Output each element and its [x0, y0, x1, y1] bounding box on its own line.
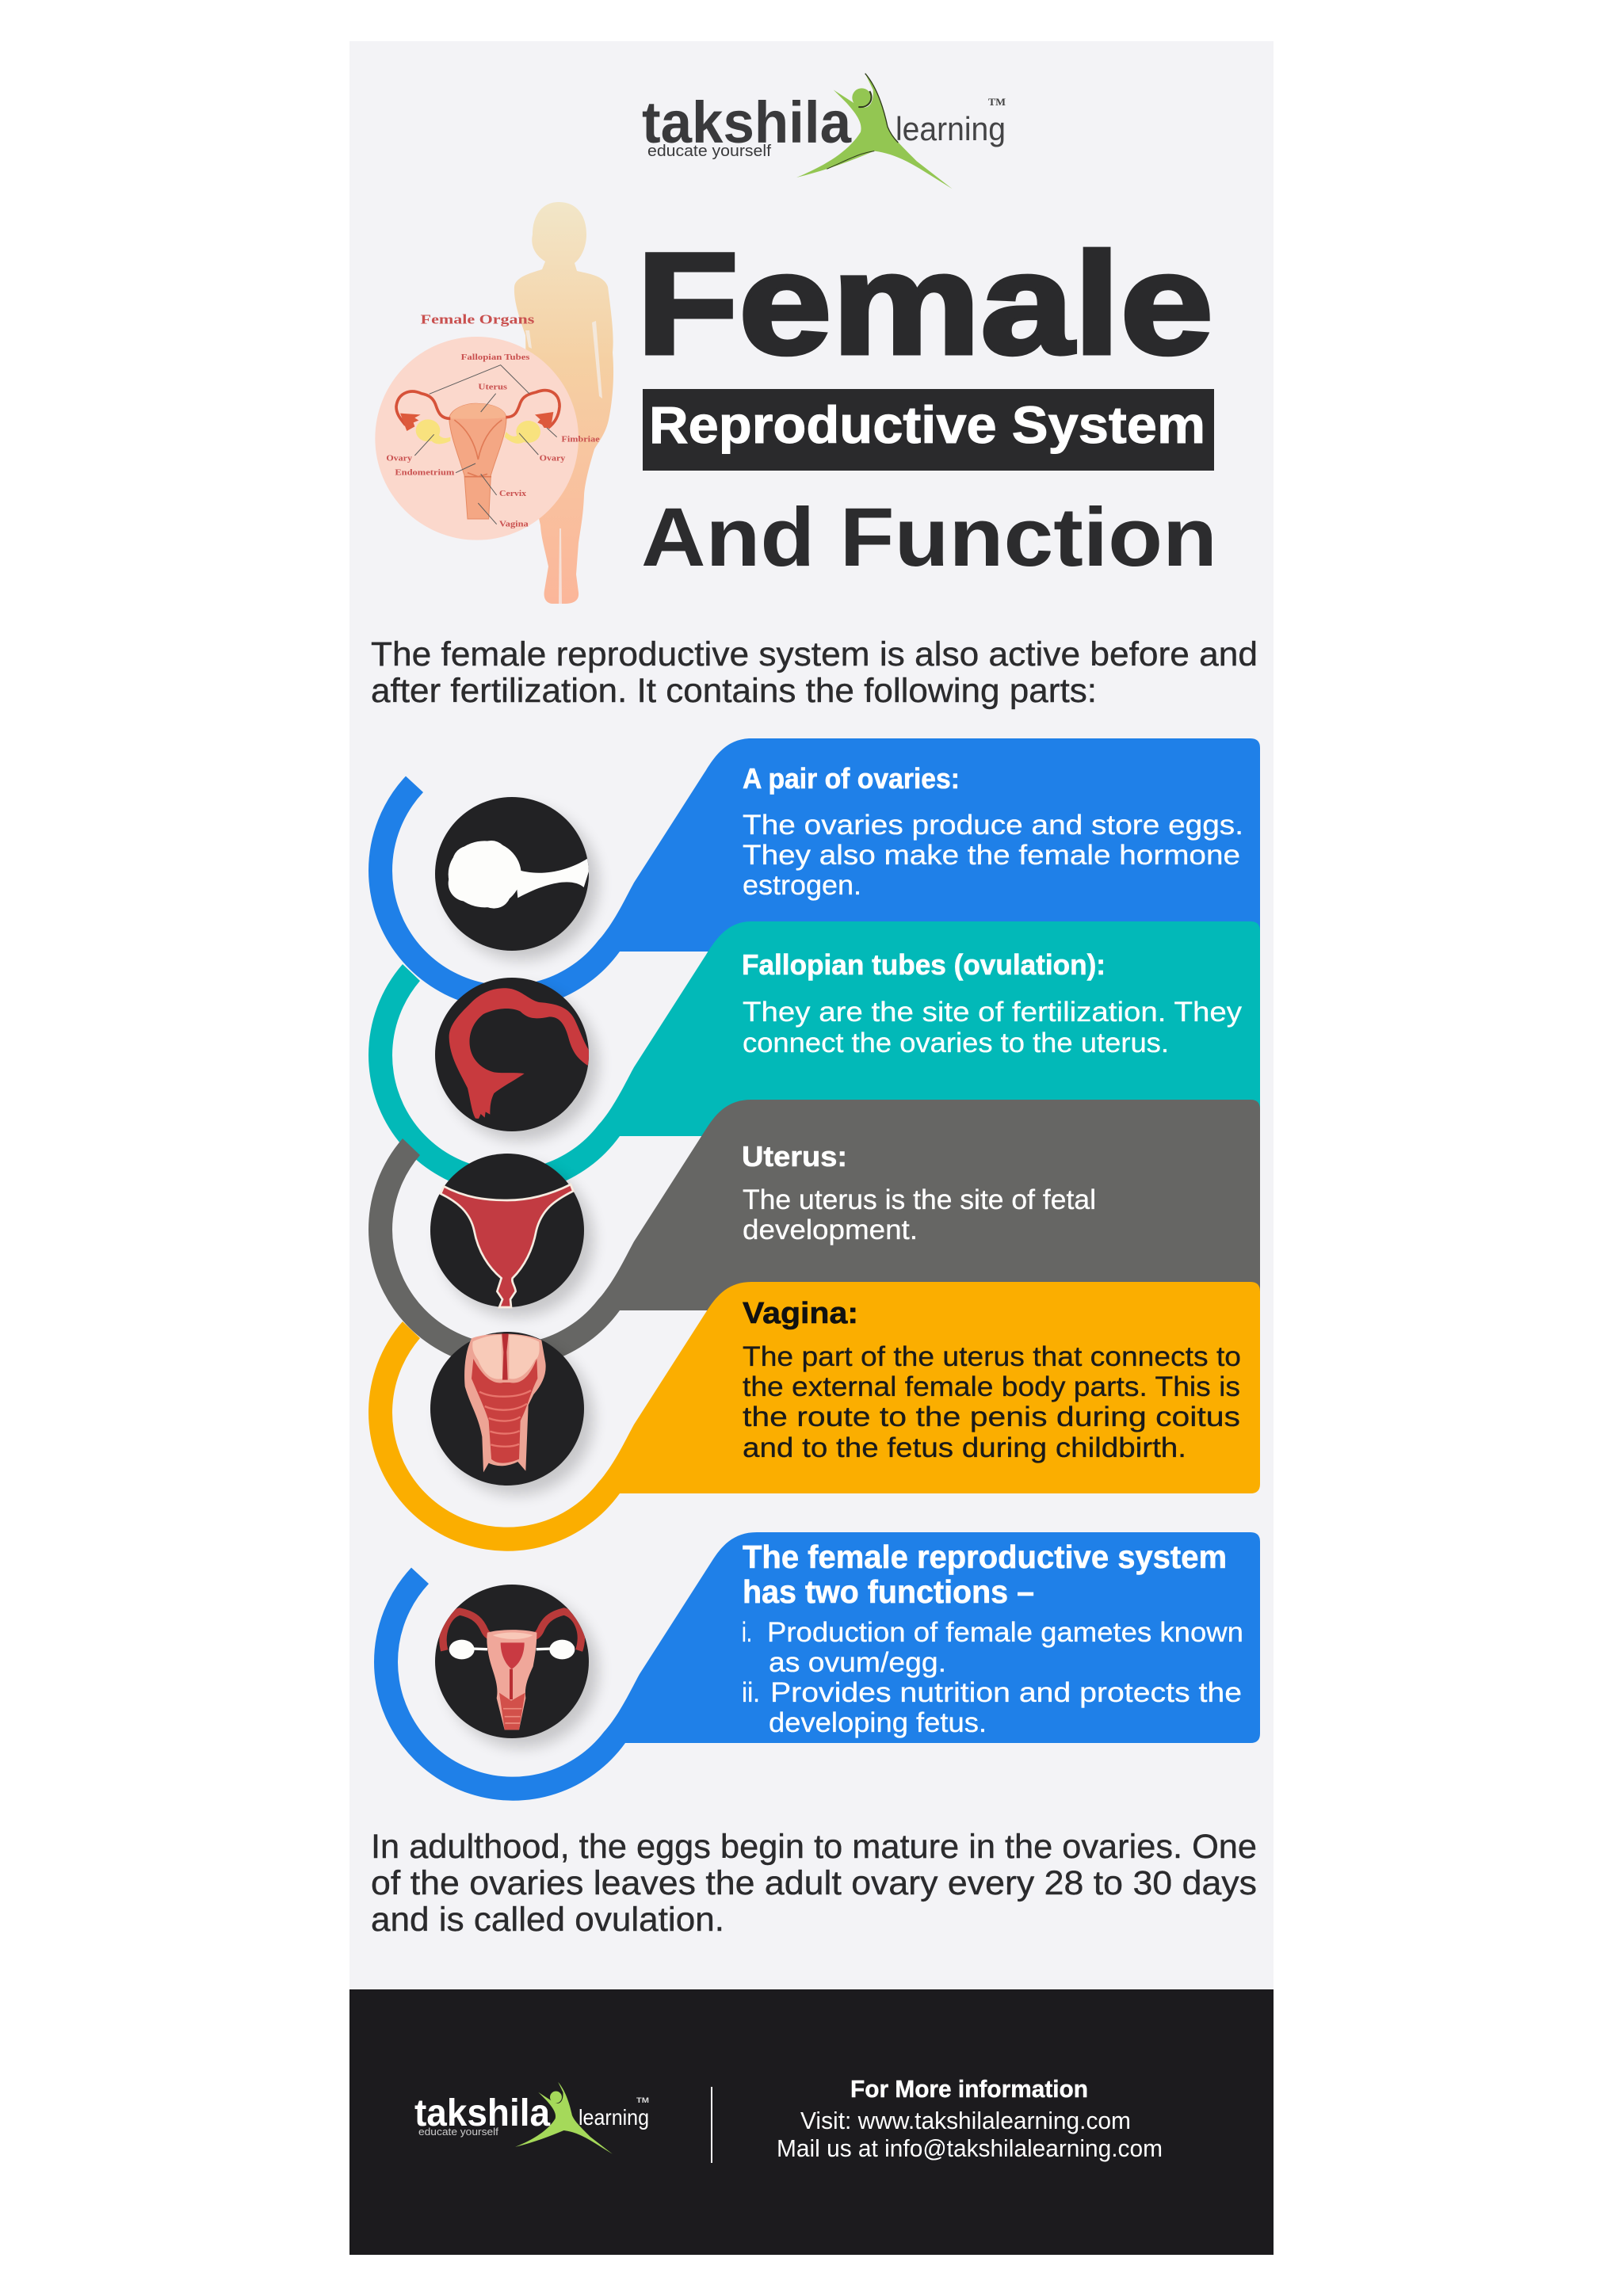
- organ labels: [386, 353, 600, 528]
- closing paragraph: [371, 1828, 1257, 1939]
- text: fallopian tubes: [742, 948, 1243, 1058]
- text: vagina: the external female body parts. This is: [743, 1371, 1240, 1402]
- text: fallopian tubes: They are the site of fertilization. They: [743, 997, 1243, 1028]
- organ labels: Uterus: [478, 383, 507, 392]
- text: a pair of ovaries: They also make the female hormone: [743, 840, 1240, 871]
- text: vagina: Vagina:: [743, 1297, 858, 1330]
- organ labels: Ovary: [386, 455, 412, 463]
- icon: fallopian tube: [435, 978, 598, 1141]
- icon: full reproductive system: [435, 1585, 598, 1748]
- text: uterus: The uterus is the site of fetal: [743, 1184, 1096, 1215]
- background panel: [349, 41, 1274, 1990]
- text: two functions: has two functions –: [743, 1573, 1034, 1610]
- text: two functions: Production of female gametes known: [767, 1617, 1243, 1648]
- text: two functions: ii.: [742, 1677, 760, 1708]
- title: And Function: And Function: [641, 491, 1217, 584]
- text: two functions: [742, 1539, 1243, 1738]
- text: two functions: The female reproductive system: [743, 1539, 1227, 1575]
- logo: takshila learning: TM: [988, 96, 1006, 108]
- logo: takshila learning: learning: [896, 110, 1006, 147]
- logo: takshila learning: [642, 74, 1006, 189]
- closing paragraph: In adulthood, the eggs begin to mature in the ovaries. One: [371, 1828, 1257, 1866]
- silhouette of a woman: [514, 202, 613, 604]
- footer logo: learning: [579, 2105, 649, 2130]
- footer logo: educate yourself: [418, 2126, 498, 2138]
- organ labels: Fallopian Tubes: [461, 353, 529, 362]
- icon: vagina cross-section: [430, 1332, 594, 1495]
- footer divider: [711, 2087, 712, 2163]
- footer contact info: Visit: www.takshilalearning.com: [800, 2107, 1131, 2134]
- ribbon: ovaries: [369, 738, 1260, 1009]
- text: fallopian tubes: connect the ovaries to the uterus.: [743, 1028, 1169, 1058]
- footer: [349, 1989, 1274, 2255]
- footer logo: takshila: [414, 2092, 550, 2134]
- ribbon: functions: [374, 1532, 1260, 1801]
- text: a pair of ovaries: [743, 762, 1243, 901]
- organ labels: Fimbriae: [561, 436, 600, 444]
- uterus and vagina: [449, 403, 506, 519]
- footer logo: [414, 2082, 649, 2154]
- text: two functions: as ovum/egg.: [769, 1647, 946, 1678]
- text: vagina: The part of the uterus that connects to: [743, 1341, 1241, 1372]
- text: two functions: Provides nutrition and protects the: [770, 1677, 1242, 1708]
- organ labels: Cervix: [499, 490, 526, 498]
- logo: takshila learning: educate yourself: [647, 143, 771, 160]
- ovaries: [416, 419, 540, 444]
- intro paragraph: [371, 635, 1258, 710]
- ribbon: fallopian tubes: [369, 921, 1260, 1194]
- closing paragraph: of the ovaries leaves the adult ovary every 28 to 30 days: [371, 1864, 1257, 1902]
- text: vagina: the route to the penis during coitus: [743, 1402, 1240, 1432]
- footer contact info: For More information: [850, 2075, 1088, 2103]
- organ labels: Vagina: [499, 520, 529, 528]
- footer contact info: [777, 2075, 1163, 2162]
- text: fallopian tubes: Fallopian tubes (ovulation):: [742, 948, 1106, 981]
- heading: female organs: Female Organs: [421, 311, 535, 326]
- organ labels: Endometrium: [395, 468, 455, 477]
- title: Female: Female: [636, 223, 1213, 384]
- ribbon: uterus: [369, 1100, 1260, 1368]
- text: two functions: i.: [742, 1617, 752, 1648]
- closing paragraph: and is called ovulation.: [371, 1901, 724, 1939]
- intro paragraph: after fertilization. It contains the following parts:: [371, 672, 1097, 710]
- organ labels: Ovary: [540, 455, 565, 463]
- pink circle backdrop: [375, 337, 579, 540]
- icon: uterus cross-section: [430, 1154, 594, 1317]
- text: a pair of ovaries: A pair of ovaries:: [743, 762, 960, 795]
- intro paragraph: The female reproductive system is also active before and: [371, 635, 1258, 673]
- ribbon: vagina: [369, 1282, 1260, 1551]
- fallopian tubes: [396, 391, 559, 428]
- icon: ovary: [435, 797, 598, 960]
- callout lines: [414, 365, 557, 524]
- title: Reproductive System: [643, 389, 1214, 471]
- organ diagram: [375, 311, 600, 540]
- text: uterus: development.: [743, 1215, 918, 1245]
- text: two functions: developing fetus.: [769, 1707, 987, 1738]
- text: uterus: Uterus:: [742, 1140, 847, 1173]
- text: a pair of ovaries: The ovaries produce and store eggs.: [743, 810, 1243, 841]
- text: vagina: [743, 1297, 1241, 1463]
- title: Reproductive System: Reproductive System: [649, 395, 1205, 454]
- logo: takshila learning: takshila: [642, 90, 852, 155]
- text: uterus: [742, 1140, 1096, 1245]
- text: vagina: and to the fetus during childbirth.: [743, 1432, 1186, 1463]
- footer contact info: Mail us at info@takshilalearning.com: [777, 2134, 1163, 2162]
- text: a pair of ovaries: estrogen.: [743, 870, 861, 901]
- footer logo: TM: [636, 2096, 649, 2104]
